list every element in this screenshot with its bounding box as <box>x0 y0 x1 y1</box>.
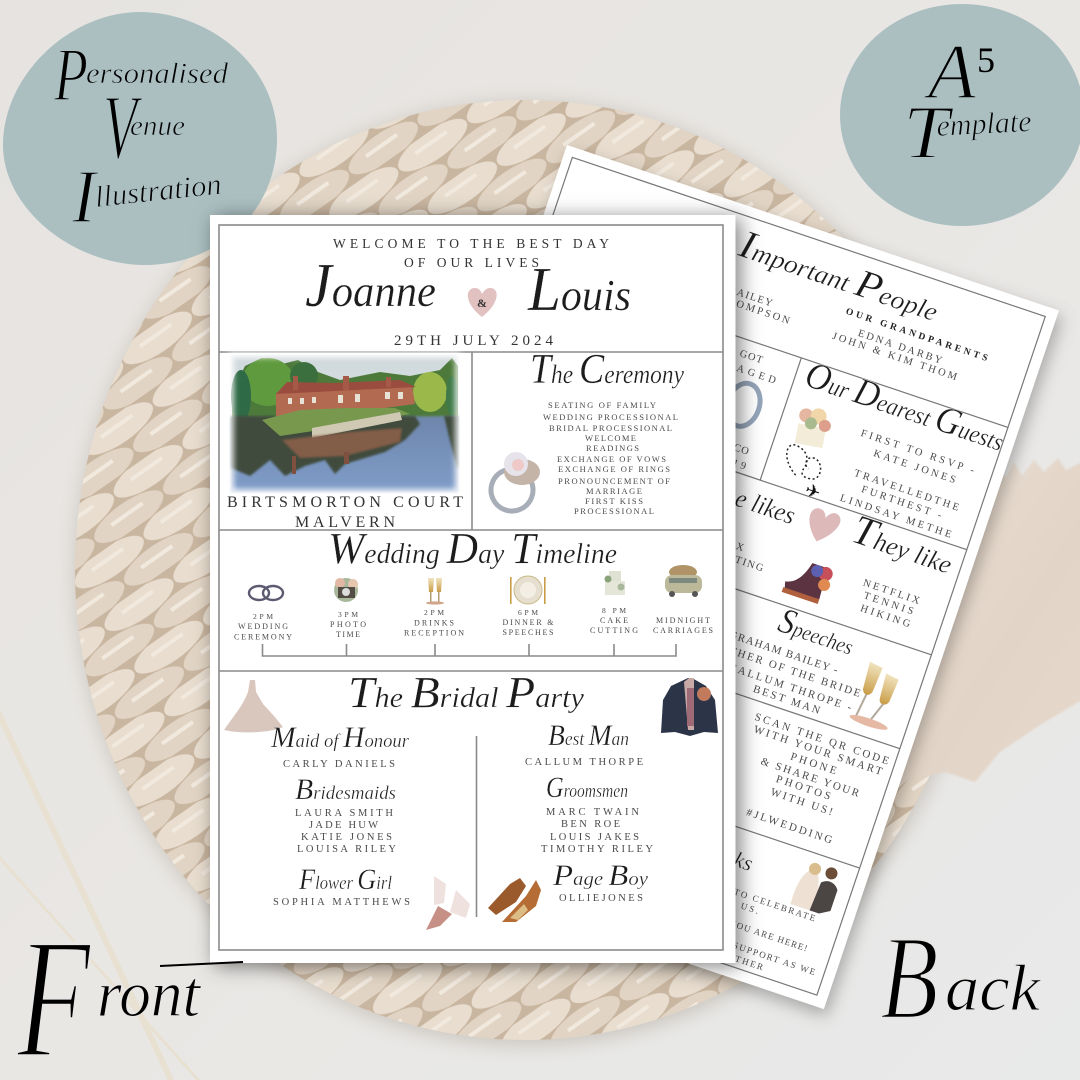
section: thanks: WE ARE SO HAPPY TO CELEBRATE <box>628 851 817 923</box>
callout circle: personalised venue illustration: ersonalised <box>86 57 229 90</box>
callout circle: A5 template: 5 <box>977 40 995 80</box>
section: speeches: CALLUM THROPE - <box>727 661 853 714</box>
timeline labels: SPEECHES <box>502 628 554 637</box>
groom's side names: OLLIEJONES <box>559 893 643 904</box>
section: QR code photo sharing: WITH YOUR SMART <box>752 723 884 778</box>
section: important people: GRAHAM BAILEY <box>672 266 774 310</box>
section: how we got engaged: ENGAGED <box>704 353 778 387</box>
section: how we got engaged <box>675 338 782 473</box>
icon: lace baby shoes <box>426 876 470 930</box>
fabric: beige ribbon on the right <box>860 458 1080 800</box>
panel: the ceremony: EXCHANGE OF VOWS <box>557 454 666 464</box>
panel: the ceremony: MARRIAGE <box>586 486 642 496</box>
bride's side names: LOUISA RILEY <box>297 844 396 855</box>
label: Back: ack <box>945 952 1042 1025</box>
section: important people: LYNN THOMPSON <box>677 279 791 327</box>
illustration: venue watercolour of Birtsmorton Court <box>231 355 458 492</box>
section: how we got engaged: 2019 <box>715 452 747 472</box>
section: QR code photo sharing <box>723 711 891 856</box>
section: speeches <box>703 583 916 739</box>
section: important people: Important People <box>733 220 945 330</box>
timeline labels: CUTTING <box>590 626 638 635</box>
timeline labels: CEREMONY <box>234 632 292 642</box>
header: welcome, names and date: WELCOME TO THE BEST DAY <box>333 236 609 251</box>
timeline labels: DINNER & <box>502 618 554 627</box>
section: QR code photo sharing: & SHARE YOUR <box>759 755 861 800</box>
label: Front: ront <box>97 958 202 1031</box>
section: she likes and they like <box>682 458 960 640</box>
section: she likes and they like: NETFLIX <box>690 526 746 554</box>
icon: groom suit <box>661 678 718 736</box>
section: thanks: TOGETHER <box>704 944 765 972</box>
icon: pink heart with ampersand: & <box>477 296 487 310</box>
icon: wedding dress <box>224 680 283 732</box>
icon: plate and cutlery <box>510 576 546 604</box>
panel: the ceremony: PRONOUNCEMENT OF <box>558 476 670 486</box>
timeline labels: TIME <box>336 630 360 639</box>
section: QR code photo sharing: WITH US! <box>769 786 834 818</box>
callout circle: personalised venue illustration: I <box>71 155 99 239</box>
section: speeches: FATHER OF THE BRIDE <box>712 639 862 700</box>
panel: the ceremony: WELCOME <box>585 433 636 443</box>
section: she likes and they like: HIKING <box>859 603 912 630</box>
icon: wedding cake <box>604 571 625 595</box>
timeline labels: 3PM <box>338 610 358 619</box>
groom's side names: BEN ROE <box>561 819 620 830</box>
panel: wedding day timeline <box>234 524 713 656</box>
section: important people: EDNA DARBY <box>856 328 944 367</box>
timeline labels: CARRIAGES <box>653 626 713 635</box>
icon: pink heart with ampersand <box>468 288 497 317</box>
callout circle: personalised venue illustration: V <box>103 76 143 178</box>
callout circle: personalised venue illustration: llustration <box>93 168 223 214</box>
section: she likes and they like: She likes <box>702 461 803 533</box>
label: Back <box>880 911 1042 1045</box>
timeline labels: 6PM <box>518 608 538 617</box>
bride's side names: KATIE JONES <box>301 832 392 843</box>
timeline labels: 2PM <box>253 612 273 621</box>
panel: the ceremony: WEDDING PROCESSIONAL <box>543 412 678 422</box>
dried grass stalks <box>0 712 200 1080</box>
groom's side names: Best Man <box>548 719 629 752</box>
bride's side names: CARLY DANIELS <box>283 759 395 770</box>
callout circle: A5 template: A <box>923 28 976 115</box>
icon: floral camera <box>334 578 358 602</box>
header: welcome, names and date: OF OUR LIVES <box>404 255 539 270</box>
section: our dearest guests: FURTHEST - <box>860 484 943 522</box>
groom's side names: Page Boy <box>552 859 649 892</box>
section: thanks: THANK YOU ARE HERE! <box>690 905 809 953</box>
timeline labels: RECEPTION <box>404 628 464 638</box>
callout circle: personalised venue illustration <box>3 12 277 265</box>
section: she likes and they like: KNITTING <box>704 545 765 574</box>
bride's side names: LAURA SMITH <box>295 808 393 819</box>
section: QR code photo sharing: SCAN THE QR CODE <box>753 711 891 768</box>
panel: the ceremony: BRIDAL PROCESSIONAL <box>549 423 672 433</box>
icon: diamond ring <box>484 452 540 518</box>
icon: dotted heart flight path with plane <box>774 443 832 503</box>
venue caption <box>227 494 463 531</box>
groom's side names: TIMOTHY RILEY <box>541 844 653 855</box>
bride's side names: Flower Girl <box>298 863 392 896</box>
section: speeches: BEST MAN <box>751 683 822 717</box>
icon: vintage camper van <box>665 565 702 597</box>
groom's side names: CALLUM THORPE <box>525 757 643 768</box>
groom's side names: Groomsmen <box>546 771 628 804</box>
bride's side names: JADE HUW <box>309 820 378 831</box>
section: our dearest guests: KATE JONES <box>872 448 957 486</box>
section: QR code photo sharing: PHONE <box>789 751 838 777</box>
icon: pink heart <box>803 506 842 546</box>
icon: champagne glasses <box>426 578 444 605</box>
header: welcome, names and date: Louis <box>527 256 631 324</box>
timeline labels: PHOTO <box>330 620 366 629</box>
timeline labels: 2PM <box>424 608 444 617</box>
groom's side names: LOUIS JAKES <box>550 832 639 843</box>
callout circle: personalised venue illustration: enue <box>130 111 185 142</box>
icon: dotted heart flight path with plane: ✈ <box>803 480 823 503</box>
icon: bouquet envelope <box>790 403 835 452</box>
section: our dearest guests: FIRST TO RSVP - <box>859 428 976 477</box>
section: how we got engaged: MOROCCO <box>692 429 751 458</box>
timeline labels: CAKE <box>600 616 628 625</box>
bride's side names: Bridesmaids <box>295 773 396 806</box>
section: thanks: THANK YOUR SUPPORT AS WE <box>658 915 817 977</box>
panel: the ceremony: FIRST KISS <box>585 496 643 506</box>
section: thanks: Thanks <box>680 818 760 879</box>
panel: the ceremony: The Ceremony <box>530 347 684 393</box>
panel: wedding day timeline: Wedding Day Timeline <box>328 524 617 573</box>
section: QR code photo sharing: PHOTOS <box>774 773 832 803</box>
timeline labels: MIDNIGHT <box>656 616 710 625</box>
panel: the ceremony: EXCHANGE OF RINGS <box>558 464 670 474</box>
section: she likes and they like: They like <box>846 507 960 583</box>
venue caption: MALVERN <box>295 514 395 531</box>
panel: the bridal party: The Bridal Party <box>348 668 585 717</box>
icon: brown brogue shoes <box>488 878 541 922</box>
section: our dearest guests <box>768 353 1011 553</box>
section: QR code photo sharing: #JLWEDDING <box>745 806 834 847</box>
timeline bracket <box>262 644 676 656</box>
panel: the bridal party <box>224 668 718 930</box>
callout circle: A5 template <box>840 4 1080 226</box>
panel: the ceremony: PROCESSIONAL <box>574 506 654 516</box>
section: our dearest guests: LINDSAY METHE <box>838 493 953 541</box>
icon: champagne flutes <box>848 661 906 733</box>
header: welcome, names and date: 29TH JULY 2024 <box>394 333 554 349</box>
section: speeches: GRAHAM BAILEY - <box>727 629 840 677</box>
panel: back page of the order of the day <box>332 145 1059 1009</box>
icon: wedding couple <box>790 858 844 917</box>
panel: the ceremony: READINGS <box>586 443 639 453</box>
section: important people: OUR GRANDPARENTS <box>844 307 989 364</box>
groom's side names: MARC TWAIN <box>546 807 639 818</box>
section: she likes and they like: NETFLIX <box>862 578 921 607</box>
bride's side names: SOPHIA MATTHEWS <box>273 897 410 908</box>
section: how we got engaged: WE GOT <box>717 341 765 366</box>
header: welcome, names and date <box>305 236 631 349</box>
callout circle: A5 template: T <box>903 91 954 175</box>
section: our dearest guests: Our Dearest Guests <box>800 353 1011 460</box>
icon: floral boots <box>782 556 836 606</box>
section: she likes and they like: TENNIS <box>862 590 915 618</box>
callout circle: A5 template: emplate <box>936 105 1032 143</box>
panel: the ceremony: SEATING OF FAMILY <box>548 400 656 410</box>
section: speeches: Speeches <box>774 600 860 663</box>
panel: the ceremony <box>484 347 684 518</box>
icon: wedding rings <box>249 586 283 600</box>
label: Back: B <box>880 911 939 1045</box>
label: Front <box>16 904 243 1080</box>
bride's side names <box>270 721 410 908</box>
section: important people: JOHN & KIM THOM <box>831 331 959 383</box>
venue caption: BIRTSMORTON COURT <box>227 494 463 511</box>
groom's side names <box>525 719 653 904</box>
section: thanks: WITH US. <box>704 889 760 916</box>
header: welcome, names and date: Joanne <box>305 252 436 320</box>
section: important people <box>668 203 1005 390</box>
timeline labels: 8 PM <box>602 606 626 615</box>
section: thanks <box>608 803 850 989</box>
woven round placemat <box>75 100 977 1044</box>
callout circle: personalised venue illustration: P <box>53 33 88 117</box>
timeline labels: DRINKS <box>414 618 454 628</box>
timeline labels <box>234 606 713 642</box>
section: our dearest guests: TRAVELLEDTHE <box>853 468 960 514</box>
timeline labels: WEDDING <box>238 622 288 631</box>
bride's side names: Maid of Honour <box>270 721 410 754</box>
panel: front page of the order of the day <box>210 215 736 963</box>
